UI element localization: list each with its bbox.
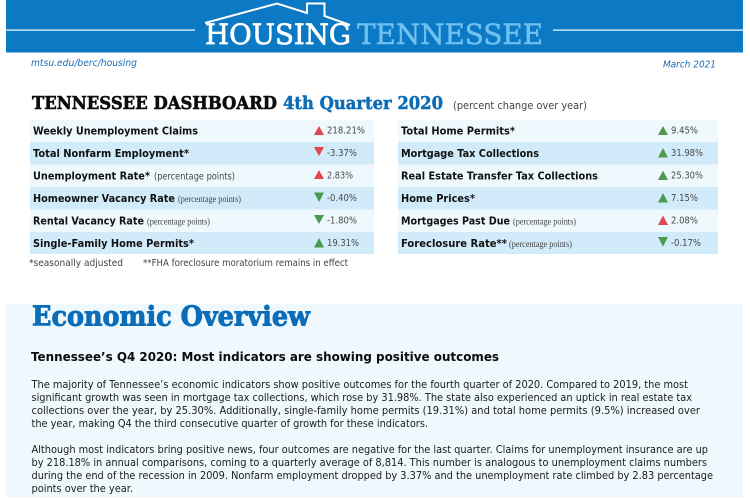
row: real estate transfer tax collections bbox=[401, 170, 703, 182]
paragraph: positive indicators: significant growth was seen in mortgage tax collections, which rose by 31.98%. The state also experienced an uptick in real estate tax bbox=[32, 393, 692, 404]
paragraph: positive indicators: the year, making Q4 the third consecutive quarter of growth for these indicators. bbox=[32, 419, 428, 430]
footnotes: *seasonally adjusted bbox=[29, 258, 123, 269]
row: mortgages past due: Mortgages Past Due bbox=[401, 216, 510, 228]
row: single-family home permits bbox=[33, 238, 359, 250]
row: unemployment rate: 2.83% bbox=[327, 170, 353, 182]
paragraph: negative indicators: points over the year. bbox=[32, 484, 133, 495]
logo: housing: HOUSING bbox=[205, 18, 351, 51]
row: weekly unemployment claims: 218.21% bbox=[327, 126, 365, 136]
date: March 2021 bbox=[663, 60, 716, 70]
row: mortgage tax collections bbox=[401, 148, 703, 160]
icon: house roof outline bbox=[205, 4, 350, 25]
row: foreclosure rate: Foreclosure Rate** bbox=[401, 239, 508, 250]
row: real estate transfer tax collections: Real Estate Transfer Tax Collections bbox=[401, 172, 598, 182]
row: foreclosure rate: -0.17% bbox=[671, 238, 701, 249]
row: foreclosure rate bbox=[401, 237, 701, 250]
dashboard title: (percent change over year) bbox=[453, 100, 587, 112]
dashboard title: 4th Quarter 2020 bbox=[283, 93, 443, 114]
header banner bbox=[6, 0, 743, 52]
row: weekly unemployment claims bbox=[33, 126, 365, 138]
row: rental vacancy rate: Rental Vacancy Rate bbox=[33, 216, 144, 228]
row: total nonfarm employment bbox=[33, 147, 357, 160]
heading: economic overview: Economic Overview bbox=[32, 302, 311, 332]
row: mortgage tax collections: 31.98% bbox=[671, 148, 703, 159]
row: real estate transfer tax collections: 25.30% bbox=[671, 170, 703, 182]
row: unemployment rate: (percentage points) bbox=[154, 172, 235, 182]
row: homeowner vacancy rate bbox=[33, 192, 357, 205]
dashboard title bbox=[32, 93, 587, 114]
paragraph: negative indicators: by 218.18% in annual comparisons, coming to a quarterly average of 8,814. This number is analogous to unemployment claims numbers bbox=[32, 458, 707, 469]
row: total home permits: 9.45% bbox=[671, 126, 698, 136]
paragraph: positive indicators bbox=[31, 380, 701, 430]
dashboard title: TENNESSEE DASHBOARD bbox=[32, 93, 277, 114]
paragraph: negative indicators: Although most indicators bring positive news, four outcomes are negative for the last quarter. Claims for unemployment insurance are up bbox=[32, 445, 708, 456]
footnotes: **FHA foreclosure moratorium remains in effect bbox=[143, 258, 348, 269]
panel: economic overview bbox=[6, 302, 743, 497]
row: rental vacancy rate: (percentage points) bbox=[147, 216, 210, 226]
row: home prices: 7.15% bbox=[671, 193, 698, 204]
paragraph: negative indicators bbox=[32, 445, 713, 495]
row: foreclosure rate: (percentage points) bbox=[509, 239, 572, 249]
subheading: Tennessee’s Q4 2020: Most indicators are showing positive outcomes bbox=[31, 350, 499, 364]
row: total home permits bbox=[401, 126, 698, 138]
row: homeowner vacancy rate: (percentage points) bbox=[178, 194, 241, 204]
website link: mtsu.edu/berc/housing bbox=[31, 58, 137, 69]
row: mortgages past due: 2.08% bbox=[671, 216, 698, 226]
row: homeowner vacancy rate: Homeowner Vacancy Rate bbox=[33, 194, 175, 205]
row: home prices bbox=[401, 193, 698, 205]
row: homeowner vacancy rate: -0.40% bbox=[327, 193, 357, 204]
paragraph: positive indicators: The majority of Tennessee’s economic indicators show positive outcomes for the fourth quarter of 2020. Compared to 2019, the most bbox=[31, 380, 688, 391]
logo: tennessee: TENNESSEE bbox=[357, 18, 543, 51]
panel: left indicators table bbox=[30, 120, 374, 254]
footnotes bbox=[29, 258, 348, 269]
row: mortgage tax collections: Mortgage Tax Collections bbox=[401, 149, 539, 160]
row: total nonfarm employment: -3.37% bbox=[327, 148, 357, 159]
row: unemployment rate bbox=[33, 170, 353, 182]
row: rental vacancy rate bbox=[33, 215, 357, 228]
row: single-family home permits: Single-Family Home Permits* bbox=[33, 239, 195, 250]
row: mortgages past due: (percentage points) bbox=[513, 216, 576, 226]
row: unemployment rate: Unemployment Rate* bbox=[33, 172, 151, 182]
row: total nonfarm employment: Total Nonfarm Employment* bbox=[33, 149, 190, 160]
row: mortgages past due bbox=[401, 216, 698, 228]
row: rental vacancy rate: -1.80% bbox=[327, 216, 357, 226]
paragraph: positive indicators: collections over the year, by 25.30%. Additionally, single-family home permits (19.31%) and total home permits (9.5%) increased over bbox=[32, 406, 701, 417]
paragraph: negative indicators: during the end of the recession in 2009. Nonfarm employment dropped by 3.37% and the unemployment rate climbed by 2.83 percentage bbox=[32, 471, 713, 482]
panel: right indicators table bbox=[398, 120, 718, 254]
row: total home permits: Total Home Permits* bbox=[401, 126, 516, 138]
row: home prices: Home Prices* bbox=[401, 194, 476, 205]
row: single-family home permits: 19.31% bbox=[327, 238, 359, 249]
row: weekly unemployment claims: Weekly Unemployment Claims bbox=[33, 126, 198, 138]
